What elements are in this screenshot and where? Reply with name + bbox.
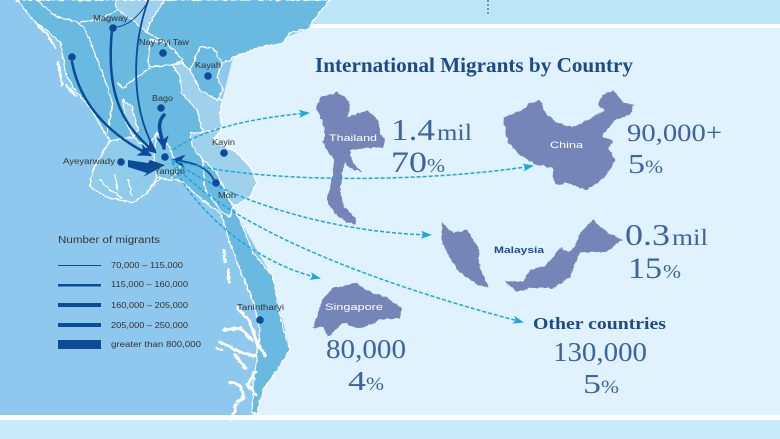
arrows: international migration	[172, 113, 532, 322]
region: Nay Pyi Taw	[148, 40, 183, 67]
map: location dots	[68, 24, 264, 324]
stat: Thailand: 70	[391, 146, 427, 179]
map: place labels	[63, 14, 284, 312]
stat: Malaysia	[625, 217, 708, 285]
region: northern boundary	[37, 0, 167, 133]
arrow: Ayeyarwady to Yangon	[128, 160, 165, 177]
stat: China: %	[645, 157, 663, 178]
stat: other countries: 130,000	[553, 337, 647, 367]
region: Yangon	[154, 133, 180, 180]
stat: other countries: 5	[583, 369, 601, 399]
country: Malaysia	[442, 220, 623, 292]
arrows: internal migration	[72, 0, 214, 180]
arrow: to Malaysia	[172, 160, 430, 235]
stat: Malaysia: mil	[672, 225, 708, 250]
map: place labels: Kayah	[195, 61, 221, 70]
stat: Singapore: %	[366, 374, 384, 395]
legend: number of migrants: 70,000 – 115,000	[111, 261, 184, 270]
islands: coastal islands	[35, 22, 265, 420]
country: Singapore	[313, 283, 402, 337]
region: northern pale	[115, 0, 165, 33]
map: Myanmar regions	[17, 0, 330, 413]
arrow: Bago to Yangon	[160, 115, 164, 148]
stat: China: 90,000+	[627, 120, 722, 147]
divider: top white line	[311, 24, 780, 28]
stat: Thailand: mil	[437, 120, 472, 145]
country: Thailand	[316, 92, 385, 224]
arrow: north to Yangon	[136, 0, 155, 150]
stat: Singapore: 4	[348, 366, 367, 396]
stat: Malaysia: 0.3	[625, 217, 670, 252]
country: Thailand: Thailand	[329, 133, 377, 144]
country: China: China	[550, 140, 584, 151]
arrow: to Singapore	[172, 162, 319, 278]
country: Singapore: Singapore	[325, 302, 383, 313]
map: place labels: Mon	[218, 191, 236, 200]
stat: Singapore	[326, 334, 406, 396]
region: Kayin	[190, 128, 257, 207]
arrow: to Thailand	[173, 113, 308, 150]
panel: bottom band	[0, 415, 780, 439]
stat: other countries	[553, 337, 647, 399]
stat: China	[627, 120, 722, 179]
arrow: Rakhine to Yangon	[72, 62, 150, 155]
arrow: to other countries	[172, 162, 522, 322]
stat: Thailand	[391, 112, 472, 179]
stat: Malaysia: %	[663, 261, 681, 283]
legend: number of migrants: 115,000 – 160,000	[111, 280, 189, 289]
legend: number of migrants: 160,000 – 205,000	[111, 301, 189, 310]
country: China	[503, 90, 634, 190]
map: place labels: Nay Pyi Taw	[139, 38, 189, 47]
region: Mon	[203, 160, 233, 217]
stat: Thailand: %	[427, 155, 445, 177]
panel: top right band	[300, 0, 780, 25]
stat: Thailand: 1.4	[391, 112, 436, 147]
arrow: Magway north	[117, 0, 149, 27]
region: Bago pale blob	[123, 100, 138, 137]
map silhouette	[17, 0, 330, 413]
map: place labels: Tanintharyi	[237, 303, 284, 312]
panel: land and data area	[200, 28, 780, 415]
arrow: to China	[172, 160, 532, 178]
map: place labels: Kayin	[212, 138, 235, 147]
region: Ayeyarwady delta	[90, 133, 157, 203]
heading: other countries: Other countries	[533, 314, 666, 333]
legend: number of migrants: greater than 800,000	[111, 340, 202, 349]
legend: number of migrants: 205,000 – 250,000	[111, 321, 189, 330]
region: Kayah	[190, 47, 223, 100]
stat: Malaysia: 15	[628, 252, 662, 285]
arrow: Mon to Yangon	[173, 160, 214, 180]
legend: number of migrants: Number of migrants	[58, 235, 160, 246]
region: eastern pale strip	[173, 63, 223, 133]
arrow: Magway to Yangon	[111, 30, 155, 152]
map: place labels: Ayeyarwady	[63, 157, 115, 166]
country: Malaysia: Malaysia	[494, 245, 545, 256]
stat: Singapore: 80,000	[326, 334, 406, 364]
stat: other countries: %	[601, 377, 619, 398]
map: place labels: Bago	[152, 94, 174, 103]
stat: China: 5	[628, 149, 645, 179]
dashed marker top right	[487, 0, 489, 14]
title: International Migrants by Country	[315, 53, 633, 77]
legend: number of migrants	[58, 235, 202, 349]
map: place labels: Yangon	[154, 167, 185, 176]
map: place labels: Magway	[93, 14, 128, 23]
